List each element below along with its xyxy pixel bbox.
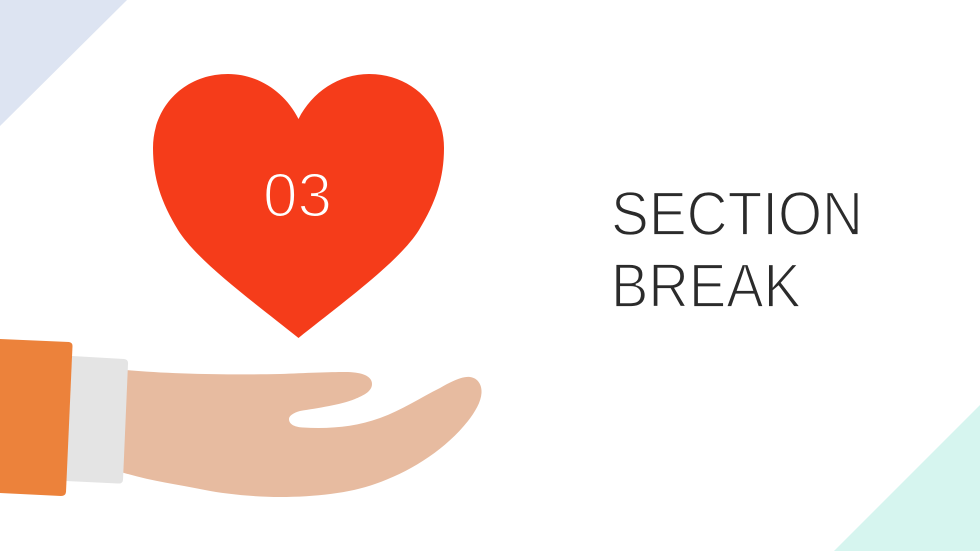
section number: 03 [263, 162, 332, 230]
corner triangle: bottom right [834, 405, 980, 551]
heading line: break: BREAK [611, 252, 801, 321]
hand [121, 370, 482, 497]
heading line: section: SECTION [611, 180, 863, 249]
heart shape [153, 74, 444, 338]
illustration: open hand with sleeve [0, 339, 482, 497]
icon: heart with number [153, 74, 444, 338]
shirt cuff [66, 356, 128, 484]
heading [611, 180, 863, 321]
corner triangle: top left [0, 0, 127, 126]
jacket sleeve [0, 339, 72, 496]
